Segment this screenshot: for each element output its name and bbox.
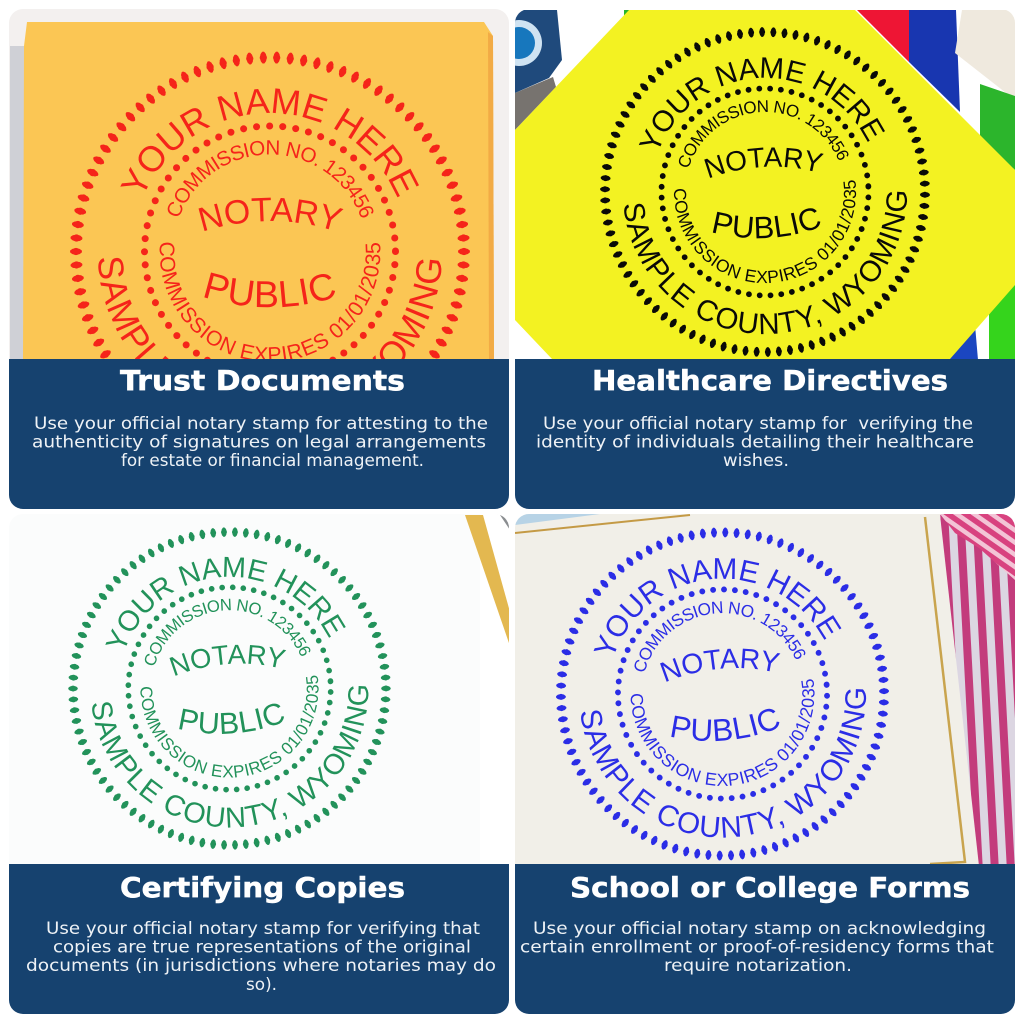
body text: Use your official notary stamp for verifying the [543,414,973,433]
body text [538,416,973,466]
stamp: black: PUBLIC [712,208,820,238]
stamp: green: YOUR NAME HERE [105,556,346,646]
heading: Healthcare Directives [592,364,948,397]
caption panel: trust documents [9,359,509,509]
stamp: blue: COMMISSION EXPIRES 01/01/2035 [630,679,815,786]
body text: Use your official notary stamp on acknowledging [533,919,986,938]
caption panel: certifying copies [9,864,509,1014]
stamp: black: COMMISSION NO. 123456 [678,100,848,167]
stamp: black: SAMPLE COUNTY, WYOMING [624,192,908,334]
stamp: black [600,27,930,357]
body text: require notarization. [664,956,852,975]
body text: Use your official notary stamp for verifying that [46,919,481,938]
caption panel: school or college forms [515,864,1015,1014]
photo: orange sticky note [9,9,509,361]
stamp: blue: COMMISSION NO. 123456 [634,601,806,672]
stamp: red: COMMISSION NO. 123456 [168,140,374,218]
stamp: blue: SAMPLE COUNTY, WYOMING [581,689,866,838]
stamp: red [70,52,470,359]
body text: documents (in jurisdictions where notaries may do [26,956,496,975]
stamp: red: YOUR NAME HERE [120,88,419,198]
body text: identity of individuals detailing their healthcare [536,432,974,452]
panel: trust documents [9,9,509,509]
stamp: blue: NOTARY [660,648,780,682]
stamp: black: YOUR NAME HERE [638,57,885,146]
stamp: red: SAMPLE COUNTY, WYOMING [98,258,442,359]
photo: yellow note with markers [496,9,1015,361]
stamp: green: COMMISSION NO. 123456 [144,598,310,666]
stamp: blue [556,528,889,860]
panel: school or college forms [515,514,1015,1014]
stamp: black: NOTARY [704,148,824,178]
stamp: red: NOTARY [198,198,344,231]
body text: so). [246,975,277,994]
body text: copies are true representations of the original [53,938,471,956]
body text: wishes. [723,451,789,470]
stamp: blue: PUBLIC [671,708,780,742]
stamp: green: NOTARY [170,644,286,676]
panel: healthcare directives [515,10,1015,509]
stamp: green [68,527,391,850]
stamp: green: COMMISSION EXPIRES 01/01/2035 [140,676,319,778]
body text [26,919,496,994]
stamp: blue: YOUR NAME HERE [594,558,842,652]
stamp: red: COMMISSION EXPIRES 01/01/2035 [160,242,380,359]
stamp: red: PUBLIC [204,272,335,308]
stamp: green: SAMPLE COUNTY, WYOMING [92,686,368,828]
heading: Certifying Copies [120,871,405,904]
stamp: black: COMMISSION EXPIRES 01/01/2035 [674,180,856,284]
body text: authenticity of signatures on legal arrangements [32,432,486,452]
body text [32,414,488,470]
heading: School or College Forms [570,871,970,904]
panel: certifying copies [9,515,509,1014]
caption panel: healthcare directives [515,359,1015,509]
body text [520,919,995,975]
body text: for estate or financial management. [121,451,424,470]
body text: Use your official notary stamp for attesting to the [34,414,488,433]
body text: certain enrollment or proof-of-residency forms that [520,938,995,956]
photo: white paper with gold ribbon [465,515,509,643]
photo: cream card with striped ribbon [515,514,1015,866]
heading: Trust Documents [120,364,405,397]
stamp: green: PUBLIC [179,704,284,734]
